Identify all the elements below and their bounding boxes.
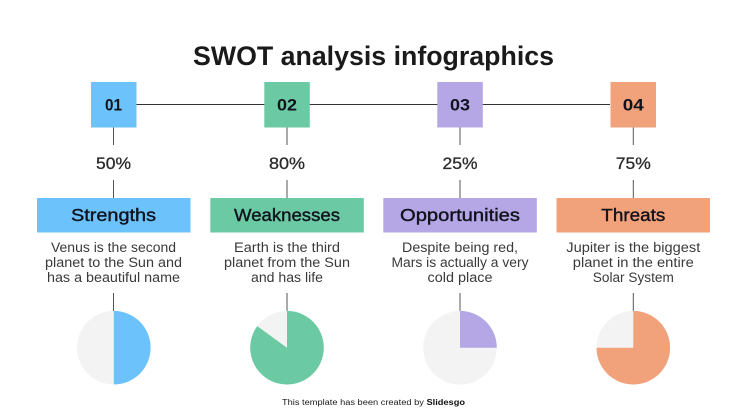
column: opportunities	[383, 82, 537, 385]
description: Weaknesses	[224, 240, 350, 285]
pie chart 50%	[77, 311, 151, 385]
description: Strengths: has a beautiful name	[47, 270, 180, 285]
percentage 75%: 75%	[616, 155, 651, 173]
description: Opportunities: Despite being red,	[402, 240, 518, 255]
number box 01: 01	[105, 96, 122, 114]
number box 02: 02	[277, 96, 297, 114]
percentage 80%: 80%	[269, 155, 305, 173]
footer credit: This template has been created by Slidesgo	[282, 398, 465, 407]
column: strengths	[37, 82, 190, 385]
description: Strengths: Venus is the second	[51, 240, 176, 255]
description: Strengths: planet to the Sun and	[45, 255, 182, 270]
description: Threats	[566, 240, 701, 285]
description: Threats: Jupiter is the biggest	[566, 240, 701, 255]
pie chart 25%	[423, 311, 497, 385]
description: Weaknesses: planet from the Sun	[224, 255, 350, 270]
number box 04	[610, 82, 656, 128]
description: Weaknesses: and has life	[251, 270, 323, 285]
number box 03	[437, 82, 483, 128]
label bar: Threats: Threats	[601, 205, 666, 225]
number box 02	[264, 82, 310, 128]
description: Strengths	[45, 240, 182, 285]
label bar: Weaknesses	[210, 198, 364, 232]
description: Threats: planet in the entire	[573, 255, 694, 270]
label bar: Strengths	[37, 198, 190, 232]
title: SWOT analysis infographics	[193, 41, 554, 71]
description: Threats: Solar System	[593, 270, 674, 285]
description: Weaknesses: Earth is the third	[234, 240, 340, 255]
description: Opportunities: cold place	[428, 270, 492, 285]
pie chart 80%	[250, 311, 324, 385]
description: Opportunities: Mars is actually a very	[392, 255, 529, 270]
percentage 25%: 25%	[442, 155, 478, 173]
percentage 50%: 50%	[96, 155, 131, 173]
description: Opportunities	[392, 240, 529, 285]
column: threats	[556, 82, 710, 385]
label bar: Opportunities	[383, 198, 537, 232]
pie chart 75%	[596, 311, 670, 385]
label bar: Strengths: Strengths	[71, 205, 156, 225]
number box 01	[91, 82, 136, 128]
label bar: Threats	[556, 198, 710, 232]
column: weaknesses	[210, 82, 364, 385]
label bar: Weaknesses: Weaknesses	[234, 205, 340, 225]
connector line between number boxes	[136, 104, 610, 106]
number box 03: 03	[450, 96, 470, 114]
label bar: Opportunities: Opportunities	[400, 205, 520, 225]
number box 04: 04	[623, 96, 644, 114]
